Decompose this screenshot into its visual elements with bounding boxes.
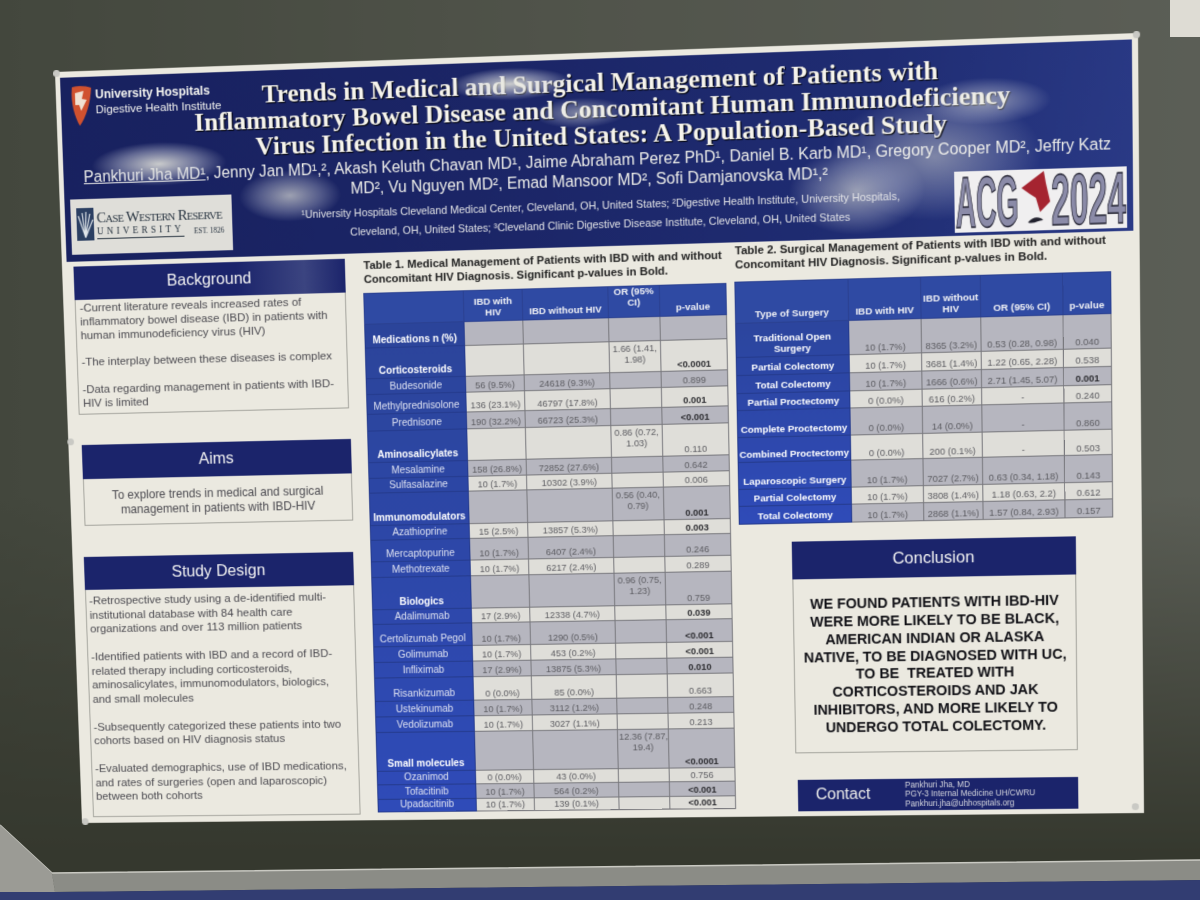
panel: conclusion [792,536,1078,754]
header band [60,39,1133,262]
table 1: medical management: 46797 (17.8%) [537,396,598,409]
text: background [75,293,349,415]
title: Trends in Medical and Surgical Management of Patients with [261,56,938,109]
text: study design [85,585,361,817]
text: conclusion [792,574,1078,753]
table 2: surgical management: 1666 (0.6%) [926,375,978,388]
table 1: medical management: Risankizumab [393,688,455,700]
table 1: medical management: 12338 (4.7%) [545,608,600,620]
table 1: medical management: 0.003 [686,521,709,533]
table 1: medical management: 24618 (9.3%) [539,377,595,389]
table 2: surgical management: 2.71 (1.45, 5.07) [988,373,1058,386]
table 2: surgical management: Partial Colectomy [751,361,834,374]
table 1: medical management: Aminosalicylates [377,448,458,461]
table 2: surgical management: 1.18 (0.63, 2.2) [992,487,1056,500]
table 1: medical management: <0.001 [688,784,717,795]
table 1: medical management: IBD without HIV [529,304,602,317]
table 1: medical management: 136 (23.1%) [470,398,521,410]
table 1: medical management: HIV [485,307,501,319]
table 1: medical management: <0.001 [685,629,714,641]
table 1: medical management: 10 (1.7%) [482,648,521,659]
text: conclusion: UNDERGO TOTAL COLECTOMY. [826,718,1046,736]
table 1: medical management: 0.96 (0.75, [618,574,662,585]
text: conclusion: WE FOUND PATIENTS WITH IBD-HIV [810,593,1059,613]
table 1: medical management: 85 (0.0%) [554,686,594,698]
text: contact details [904,780,1036,808]
table 1: medical management: 0.213 [689,716,713,727]
table 2: surgical management: 1.22 (0.65, 2.28) [987,355,1057,368]
table 1: medical management: 6217 (2.4%) [546,561,596,573]
table 2: surgical management: OR (95% CI) [993,301,1050,314]
table 1: medical management: 66723 (25.3%) [538,413,598,426]
table 1: medical management: 0.663 [689,685,712,696]
table 2: surgical management: Complete Proctectomy [741,423,847,436]
table 2: surgical management: - [1022,444,1025,455]
table 1: medical management: 564 (0.2%) [554,785,599,796]
table 2: surgical management: 3681 (1.4%) [926,357,977,369]
text: conclusion: INHIBITORS, AND MORE LIKELY TO [814,700,1058,719]
text: study design: -Evaluated demographics, use of IBD medications, [95,759,347,775]
affiliations: ¹University Hospitals Cleveland Medical Center, Cleveland, OH, United States; ²Digestive Health Institute, University Hospitals, [301,191,900,221]
logo text: Digestive Health Institute [95,98,222,116]
table 1: medical management: Tofacitinib [405,787,449,798]
text: study design: -Retrospective study using a de-identified multi- [89,590,326,607]
table 1: medical management: 0.86 (0.72, [614,426,659,438]
text: conclusion: CORTICOSTEROIDS AND JAK [832,682,1039,701]
title: Inflammatory Bowel Disease and Concomitant Human Immunodeficiency [194,80,1010,137]
table 1: medical management: Immunomodulators [373,511,466,524]
table 2: surgical management: 0.001 [1076,372,1100,384]
text: background: human immunodeficiency virus (HIV) [80,323,265,342]
table 1: medical management: Ustekinumab [396,704,453,715]
table 2: surgical management: 0.53 (0.28, 0.98) [987,337,1057,350]
authors: MD², Vu Nguyen MD², Emad Mansoor MD², Sofi Damjanovska MD¹,² [350,166,828,198]
authors: Pankhuri Jha MD¹, Jenny Jan MD¹,², Akash Keluth Chavan MD¹, Jaime Abraham Perez PhD¹, Daniel B. Karb MD¹, Gregory Cooper MD², Jeffry Katz [83,136,1111,186]
table 1: medical management: 10 (1.7%) [480,563,519,574]
table 1: medical management: 1.98) [624,353,646,365]
text: study design: between both cohorts [96,788,203,803]
panel: study design [84,552,361,818]
table 1: medical management: 1290 (0.5%) [548,631,598,643]
table 1: medical management: 17 (2.9%) [481,610,521,621]
table 1: medical management: <0.0001 [685,755,719,766]
text: contact details: Pankhuri.jha@uhhospitals.org [905,798,1014,808]
table 1: medical management: <0.001 [688,796,717,808]
table 1: medical management: Prednisone [392,417,442,429]
table 1: medical management: p-value [676,301,710,313]
text: conclusion: AMERICAN INDIAN OR ALASKA [825,629,1044,648]
text: conclusion: NATIVE, TO BE DIAGNOSED WITH UC, [804,646,1067,666]
heading: study design: Study Design [171,561,266,581]
table 1: medical management: Medications n (%) [372,333,457,346]
table 2: surgical management: 8365 (3.2%) [925,339,977,351]
panel: background [73,258,350,415]
caption: table 1: Table 1. Medical Management of Patients with IBD with and without [363,250,722,272]
panel: contact [798,777,1078,811]
table 1: medical management: 0.642 [684,459,708,470]
table 1: medical management: 56 (9.5%) [475,379,515,390]
table 2: surgical management: Total Colectomy [758,510,833,522]
table 1: medical management: 19.4) [633,741,654,752]
table 1: medical management: 139 (0.1%) [554,798,599,809]
caption: table 1 [363,250,722,286]
table 1: medical management: 13857 (5.3%) [543,524,598,536]
table 1: medical management [363,283,736,812]
table 1: medical management: OR (95% [614,286,654,298]
table 1: medical management: Azathioprine [392,527,447,538]
table 2: surgical management: - [1021,391,1024,402]
heading: conclusion: Conclusion [892,548,974,568]
heading: conclusion [792,536,1076,579]
table 1: medical management: 0.246 [686,543,709,555]
text: background: HIV is limited [83,394,149,409]
table 2: surgical management: Surgery [774,343,811,355]
table 1: medical management: 0.001 [683,394,707,405]
table 2: surgical management [734,271,1113,525]
table 1: medical management: 0.756 [690,769,714,780]
table 1: medical management: Golimumab [398,649,448,661]
table 2: surgical management: 10 (1.7%) [867,508,908,520]
table 1: medical management: 43 (0.0%) [556,770,596,782]
table 2: surgical management: 0.503 [1076,442,1100,454]
table 2: surgical management: 10 (1.7%) [865,359,906,371]
table 1: medical management: 453 (0.2%) [551,647,596,658]
table 1: medical management: 10 (1.7%) [479,547,519,558]
table 1: medical management: CI) [627,297,640,309]
table 1: medical management: 190 (32.2%) [471,415,521,427]
text: study design: organizations and over 113 million patients [90,618,302,635]
logo: Case Western Reserve University: UNIVERSITY [97,225,184,237]
table 2: surgical management: 0 (0.0%) [869,446,905,458]
table 1: medical management: 10 (1.7%) [483,719,523,730]
table 1: medical management: 12.36 (7.87, [619,730,668,742]
heading: aims [82,439,352,479]
heading: background: Background [166,269,252,290]
table 2: surgical management: IBD with HIV [855,305,914,318]
table 1: medical management: Small molecules [387,758,465,770]
caption: table 2: Table 2. Surgical Management of Patients with IBD with and without [735,235,1106,257]
table 1: medical management: 0.759 [687,592,710,603]
table 2: surgical management: 1.57 (0.84, 2.93) [989,505,1059,518]
table 1: medical management: Mesalamine [391,464,445,476]
table 1: medical management: 0.110 [684,443,707,454]
table 2: surgical management: p-value [1069,300,1104,312]
table 1: medical management: Methylprednisolone [373,400,460,413]
table 1: medical management: IBD with [474,296,512,308]
table 1: medical management: 13875 (5.3%) [546,663,601,674]
logo: University Hospitals [70,83,222,126]
table 2: surgical management: 0.63 (0.34, 1.18) [989,470,1058,483]
text: conclusion: WERE MORE LIKELY TO BE BLACK, [810,611,1059,631]
heading: contact: Contact [816,786,871,803]
logo: Case Western Reserve University: EST. 1826 [194,226,224,235]
table 1: medical management: 3027 (1.1%) [550,718,600,729]
table 2: surgical management: Type of Surgery [755,307,829,320]
text: background: inflammatory bowel disease (IBD) in patients with [80,308,328,328]
text: study design: cohorts based on HIV diagnosis status [94,731,285,747]
table 1: medical management: 0.039 [687,607,711,618]
table 2: surgical management: HIV [942,304,959,315]
heading: background [73,259,346,300]
table 1: medical management: 0.010 [688,661,712,672]
text: contact details: Pankhuri Jha, MD [905,780,970,790]
table 2: surgical management: 0 (0.0%) [869,421,904,433]
table 2: surgical management: 0.240 [1076,389,1100,401]
table 1: medical management: Sulfasalazine [389,479,448,491]
table 2: surgical management: - [1021,419,1025,430]
table 1: medical management: Certolizumab Pegol [380,633,466,645]
table 1: medical management: <0.001 [681,411,710,422]
table 1: medical management: 10 (1.7%) [481,632,521,644]
table 1: medical management: 0.56 (0.40, [616,489,660,500]
heading: study design [84,552,354,590]
text: study design: -Subsequently categorized these patients into two [93,716,341,733]
table 1: medical management: 1.23) [629,585,651,596]
affiliations [74,86,1035,239]
table 2: surgical management: Laparoscopic Surgery [743,475,846,488]
table 1: medical management: Methotrexate [392,564,450,576]
text: study design: institutional database with 84 health care [89,604,293,621]
panel: aims [82,438,354,526]
caption: table 1: Concomitant HIV Diagnosis. Significant p-values in Bold. [364,265,668,286]
caption: table 2: Concomitant HIV Diagnosis. Significant p-values in Bold. [735,250,1047,271]
logo text: University Hospitals [95,83,210,101]
table 2: surgical management: 200 (0.1%) [929,445,976,457]
table 1: medical management: 10 (1.7%) [485,786,525,797]
text: aims [83,473,353,526]
title: Virus Infection in the United States: A Population-Based Study [255,109,947,161]
table 2: surgical management: 0.040 [1075,336,1099,347]
table 2: surgical management: 7027 (2.7%) [927,472,979,484]
table 1: medical management: 6407 (2.4%) [546,545,596,557]
table 1: medical management: Corticosteroids [379,364,452,377]
text: study design: and small molecules [92,690,194,705]
table 2: surgical management: 0.143 [1076,469,1100,481]
table 1: medical management: 72852 (27.6%) [539,461,599,473]
table 1: medical management: Biologics [399,596,444,608]
text: study design: and rates of surgeries (open and laparoscopic) [95,773,327,789]
table 2: surgical management: Combined Proctectomy [739,448,849,461]
title [74,56,1012,161]
table 1: medical management: 10 (1.7%) [485,798,525,809]
table 2: surgical management: IBD without [923,292,978,305]
logo text [74,83,222,125]
table 1: medical management: Upadacitinib [400,799,454,810]
text: background: -Data regarding management in patients with IBD- [82,376,334,396]
authors [74,86,1112,198]
text: aims: management in patients with IBD-HIV [121,498,315,516]
table 2: surgical management: 3808 (1.4%) [927,489,979,501]
text: background: -The interplay between these diseases is complex [81,349,332,369]
table 1: medical management: 1.03) [626,437,647,449]
table 2: surgical management: Total Colectomy [755,379,831,392]
table 1: medical management: 158 (26.8%) [472,463,522,475]
table 1: medical management: 0 (0.0%) [487,771,522,782]
table 1: medical management: <0.001 [685,645,714,656]
table 2: surgical management: 0.157 [1077,505,1101,516]
table 2: surgical management: Traditional Open [754,331,831,345]
table 2: surgical management: 14 (0.0%) [932,420,973,432]
table 2: surgical management: 2868 (1.1%) [928,507,979,519]
table 2: surgical management: Partial Proctectomy [747,396,839,409]
table 1: medical management: 0.248 [689,700,712,711]
table 2: surgical management: 0.612 [1077,487,1101,498]
table 1: medical management: Mercaptopurine [386,548,455,560]
affiliations: Cleveland, OH, United States; ³Cleveland Clinic Digestive Disease Institute, Cleveland, OH, United States [350,212,850,239]
text: contact details: PGY-3 Internal Medicine UH/CWRU [905,789,1035,799]
table 1: medical management: Budesonide [390,380,442,393]
table 1: medical management: 15 (2.5%) [479,525,519,537]
table 2: surgical management: 0.860 [1076,417,1100,428]
text: conclusion: TO BE TREATED WITH [856,665,1014,683]
table 2: surgical management: 10 (1.7%) [867,490,908,502]
table 1: medical management: 0.79) [627,500,649,511]
table 1: medical management: Adalimumab [395,611,450,623]
table 1: medical management: 10 (1.7%) [483,703,523,714]
table 2: surgical management: 0.538 [1075,354,1099,366]
table 1: medical management: 10302 (3.9%) [542,476,597,488]
text: study design: aminosalicylates, immunomodulators, biologics, [92,674,329,691]
table 1: medical management: Infliximab [403,665,444,676]
table 2: surgical management: 10 (1.7%) [865,341,906,353]
table 1: medical management: 17 (2.9%) [482,664,522,675]
table 2: surgical management: 0 (0.0%) [868,394,904,406]
table 2: surgical management: 10 (1.7%) [865,377,906,389]
table 1: medical management: 3112 (1.2%) [550,702,599,713]
table 2: surgical management: 616 (0.2%) [929,392,975,405]
table 1: medical management: 0 (0.0%) [485,687,520,699]
heading: aims: Aims [198,449,234,468]
table 1: medical management: <0.0001 [677,358,711,370]
table 2: surgical management: 10 (1.7%) [867,473,908,485]
table 2: surgical management: Partial Colectomy [754,492,836,505]
table 1: medical management: Vedolizumab [397,719,453,731]
logo: Case Western Reserve University [70,194,233,255]
caption: table 2 [734,235,1106,271]
text: aims: To explore trends in medical and surgical [112,484,324,502]
table 1: medical management: 0.899 [683,374,706,385]
logo: Case Western Reserve University: Case Western Reserve [96,207,222,226]
table 1: medical management: 1.66 (1.41, [613,342,657,354]
table 1: medical management: 0.001 [685,507,709,518]
table 1: medical management: 0.289 [686,559,710,570]
table 1: medical management: Ozanimod [404,772,449,783]
poster [55,33,1144,823]
table 1: medical management: 0.006 [685,474,708,485]
text: background: -Current literature reveals increased rates of [79,295,301,315]
table 1: medical management: 10 (1.7%) [477,478,517,489]
text: study design: -Identified patients with IBD and a record of IBD- [91,646,332,663]
text: study design: related therapy including corticosteroids, [91,661,293,677]
